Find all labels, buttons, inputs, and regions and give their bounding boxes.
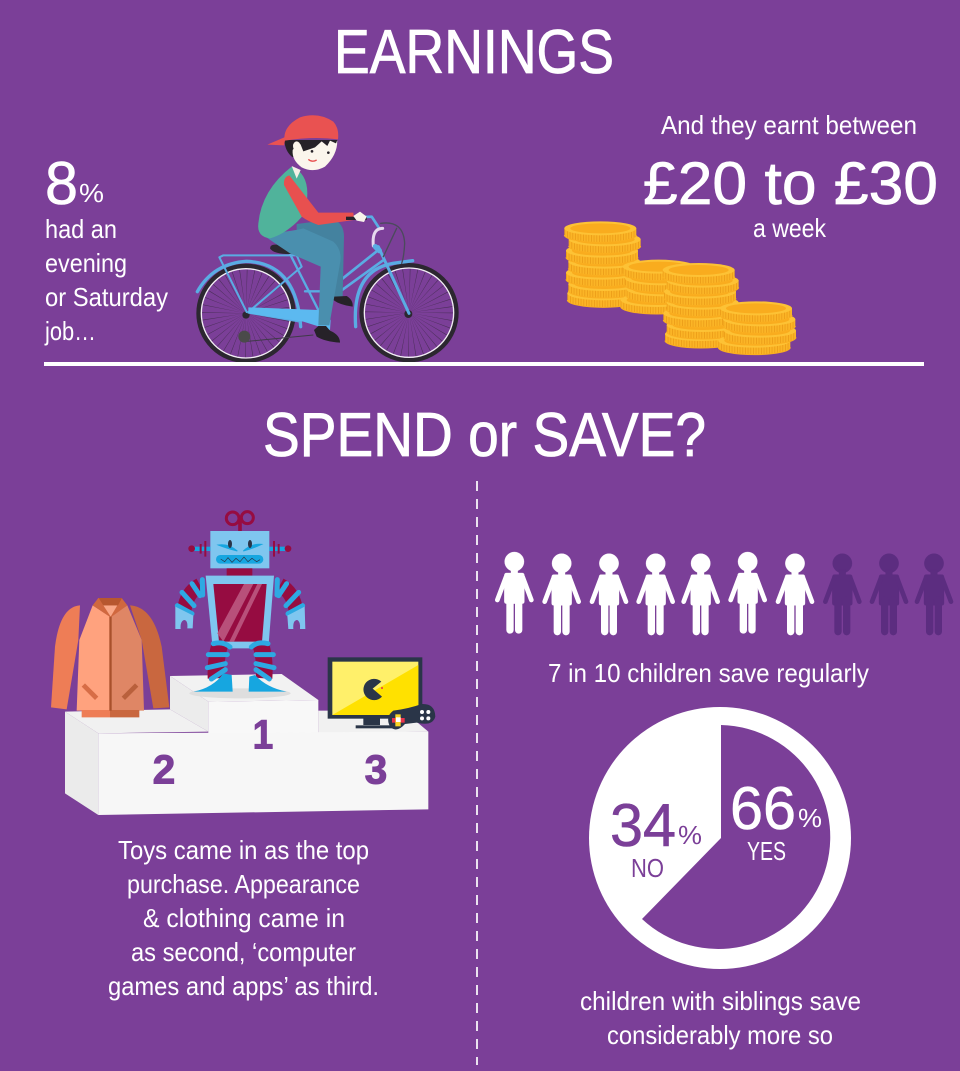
front wheel — [362, 265, 456, 360]
coin stack 2 — [621, 260, 699, 314]
podium numbers: 2 — [153, 746, 175, 792]
podium numbers: 3 — [365, 746, 387, 792]
illustration: boy riding a bicycle — [197, 115, 456, 361]
stat: 8% evening or Saturday job: or Saturday — [45, 282, 168, 312]
robot body — [206, 576, 274, 648]
text: top purchases: as second, ‘computer — [131, 937, 356, 967]
text: weekly earnings — [643, 110, 938, 243]
jacket — [51, 598, 169, 717]
face — [293, 141, 337, 170]
robot head — [210, 531, 269, 568]
robot left hand — [175, 607, 193, 629]
caption: 7 in 10: 7 in 10 children save regularly — [548, 658, 869, 688]
stat: 8% evening or Saturday job: job… — [44, 316, 96, 346]
robot right hand — [287, 607, 305, 629]
label: 66% yes: % — [798, 803, 822, 833]
label: 34% no — [610, 792, 702, 883]
label: 34% no: 34 — [610, 792, 676, 859]
eyes and mouth — [308, 150, 330, 161]
front shoe — [314, 326, 340, 343]
text: weekly earnings: a week — [753, 213, 827, 243]
text: top purchases: purchase. Appearance — [127, 869, 360, 899]
illustration: coin stacks — [564, 221, 796, 355]
fringe — [297, 140, 337, 151]
label: 66% yes: 66 — [730, 775, 796, 842]
robot neck — [227, 568, 252, 576]
robot left arm — [177, 580, 203, 614]
podium — [65, 674, 428, 815]
handlebar grip — [346, 217, 367, 220]
podium numbers — [153, 711, 387, 792]
three non-saving children — [825, 554, 951, 632]
robot right arm — [277, 580, 303, 614]
coin stack 3 — [663, 263, 739, 348]
stat: 8% evening or Saturday job — [44, 150, 168, 346]
stat: 8% evening or Saturday job: % — [79, 178, 104, 208]
title: earnings: EARNINGS — [334, 18, 614, 87]
robot left leg — [207, 643, 230, 679]
saddle — [270, 245, 294, 254]
text: top purchases — [108, 835, 379, 1001]
illustration: podium with purchases — [51, 512, 435, 815]
text: weekly earnings: £20 to £30 — [643, 150, 938, 217]
collar — [292, 166, 301, 179]
coin stack 4 — [718, 301, 796, 355]
text: top purchases: Toys came in as the top — [118, 835, 369, 865]
back leg — [297, 219, 344, 297]
arm — [284, 175, 354, 225]
game controller — [388, 704, 435, 729]
text: weekly earnings: And they earnt between — [661, 110, 917, 140]
bicycle frame — [197, 217, 413, 330]
rear wheel — [199, 266, 293, 361]
boy upper body — [258, 115, 367, 238]
coin stack 1 — [564, 221, 641, 307]
robot face — [216, 540, 263, 564]
label: 34% no: NO — [631, 853, 664, 883]
robot right leg — [251, 643, 274, 679]
robot right foot — [249, 675, 287, 692]
front leg — [262, 228, 341, 325]
computer monitor with game — [328, 657, 422, 728]
ear — [293, 141, 300, 151]
stat: 8% evening or Saturday job: 8 — [45, 150, 78, 217]
ground line — [44, 362, 924, 366]
label: 66% yes: YES — [747, 836, 786, 866]
cap — [267, 115, 338, 145]
chain and gear — [238, 331, 313, 343]
label: 34% no: % — [678, 820, 702, 850]
caption: siblings: considerably more so — [607, 1020, 833, 1050]
torso — [258, 167, 307, 238]
robot — [175, 512, 305, 692]
seven saving children — [497, 552, 812, 632]
stat: 8% evening or Saturday job: evening — [45, 248, 127, 278]
hair back — [284, 140, 337, 157]
robot wind-up key — [226, 512, 253, 531]
label: 66% yes — [730, 775, 822, 866]
pictogram: 7 in 10 children — [497, 552, 951, 632]
pie chart: children with siblings — [589, 707, 851, 969]
caption: siblings: children with siblings save — [580, 986, 861, 1016]
caption: siblings — [580, 986, 861, 1050]
text: top purchases: games and apps’ as third. — [108, 971, 379, 1001]
back shoe — [333, 296, 353, 307]
stat: 8% evening or Saturday job: had an — [45, 214, 117, 244]
robot ears — [188, 541, 291, 557]
heading: spend or save: SPEND or SAVE? — [263, 401, 706, 470]
vertical dashed divider — [476, 481, 478, 1065]
robot left foot — [193, 673, 233, 692]
podium numbers: 1 — [253, 711, 273, 757]
hand — [353, 212, 367, 222]
text: top purchases: & clothing came in — [143, 903, 345, 933]
